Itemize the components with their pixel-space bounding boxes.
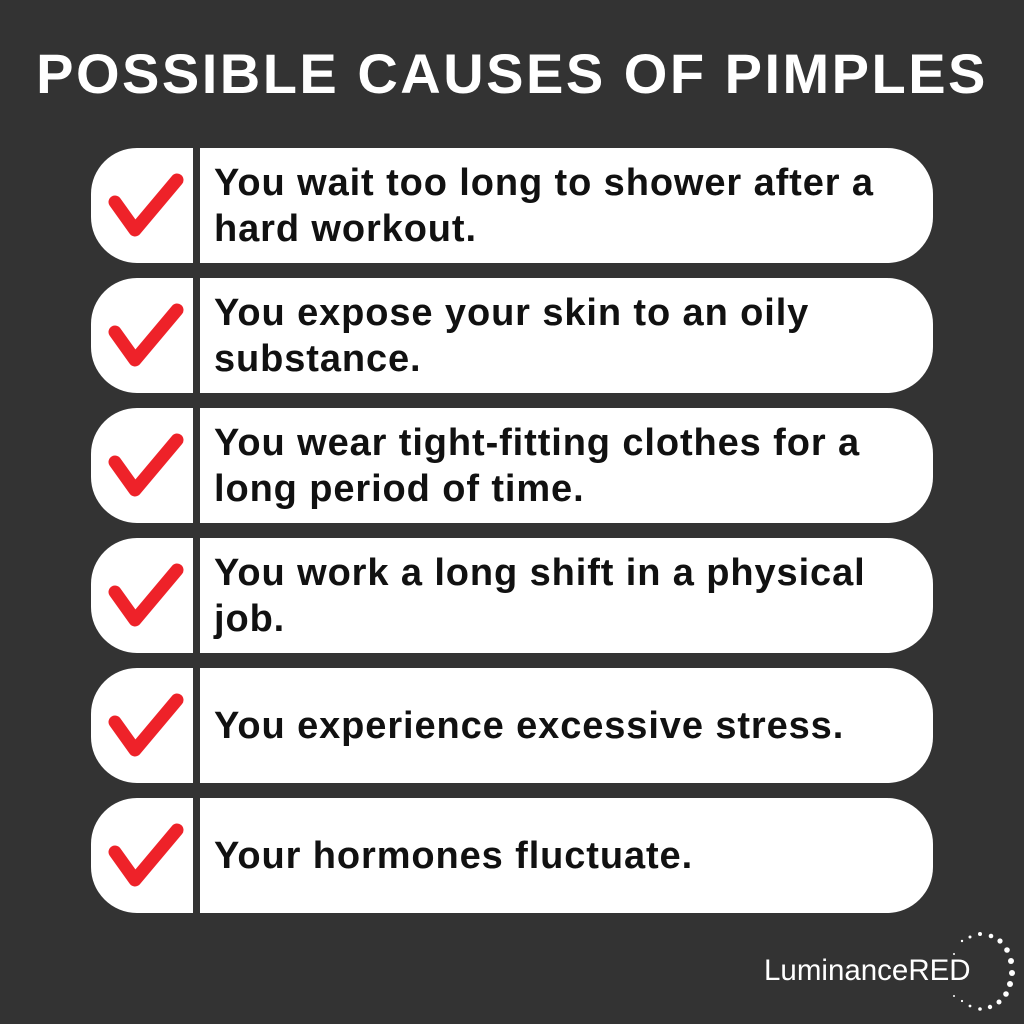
- item 6: [91, 798, 933, 913]
- item 4: [91, 538, 933, 653]
- item 1: You wait too long to shower after a: [214, 162, 874, 204]
- item 5: [91, 668, 933, 783]
- icon: check: [108, 824, 184, 886]
- item 4: You work a long shift in a physical: [214, 552, 866, 594]
- item 1: hard workout.: [214, 208, 477, 250]
- item 1: [91, 148, 933, 263]
- icon: check: [108, 694, 184, 756]
- item 4: job.: [214, 598, 285, 640]
- icon: check: [108, 434, 184, 496]
- item 2: substance.: [214, 338, 422, 380]
- item 2: You expose your skin to an oily: [214, 292, 809, 334]
- icon: check: [108, 564, 184, 626]
- icon: check: [108, 304, 184, 366]
- title: POSSIBLE CAUSES OF PIMPLES: [36, 42, 988, 105]
- icon: check: [108, 174, 184, 236]
- item 3: [91, 408, 933, 523]
- item 3: You wear tight-fitting clothes for a: [214, 422, 860, 464]
- item 2: [91, 278, 933, 393]
- logo: [764, 932, 1015, 1011]
- item 3: long period of time.: [214, 468, 585, 510]
- item 5: You experience excessive stress.: [214, 704, 844, 746]
- logo: LuminanceRED: [764, 954, 971, 987]
- item 6: Your hormones fluctuate.: [214, 834, 693, 876]
